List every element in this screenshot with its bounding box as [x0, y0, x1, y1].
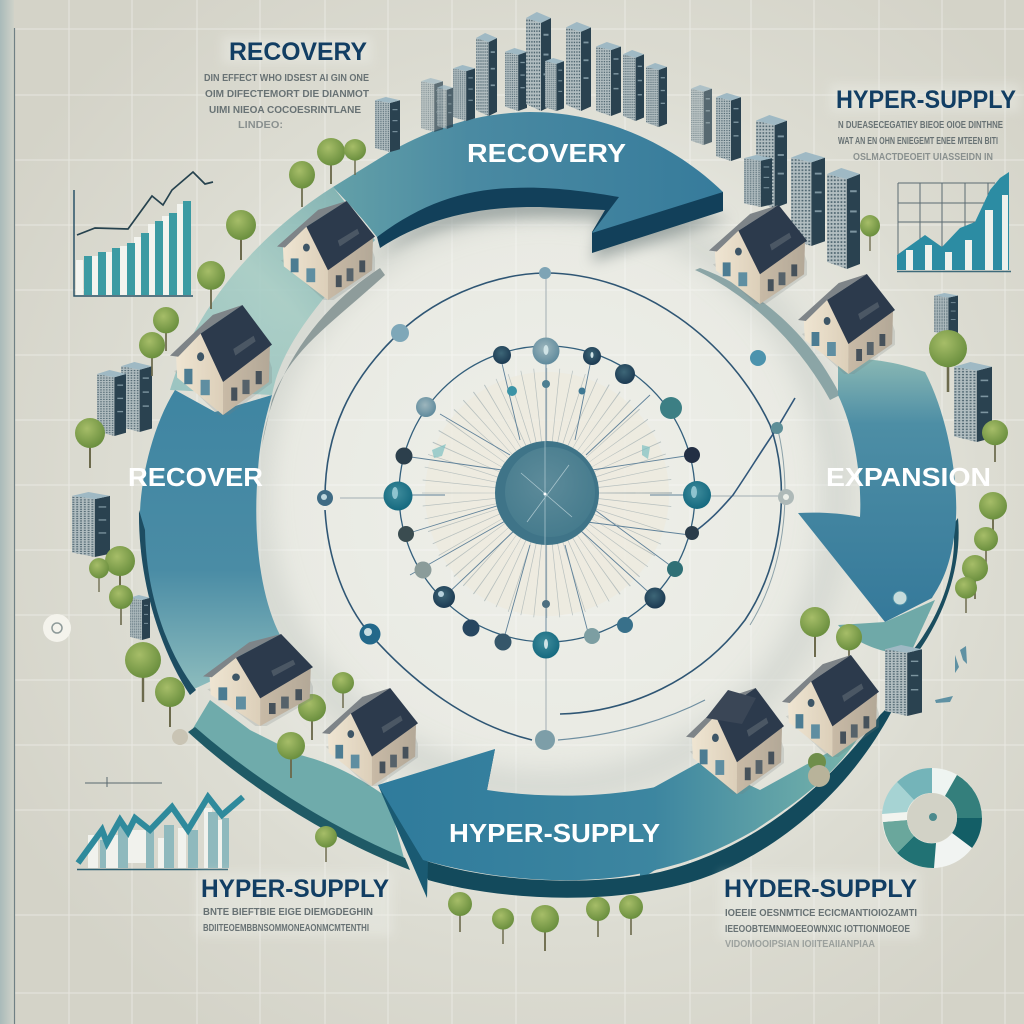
body text: OSLMACTDEOEIT UIASSEIDN IN [853, 152, 993, 163]
arrow label: RECOVERY [467, 138, 626, 168]
teal band [640, 735, 860, 880]
towers: right cluster [691, 85, 860, 269]
arrow label: HYPER-SUPPLY [449, 818, 660, 848]
small floating spheres [172, 591, 967, 745]
outer dark edge [913, 518, 959, 652]
chart: lower-left zigzag [77, 777, 243, 870]
panel: expansion arrow (right) [695, 268, 991, 653]
body text: UIMI NIEOA COCOESRINTLANE [209, 105, 361, 116]
white bars [76, 204, 184, 295]
arrow face [378, 749, 656, 880]
body text [838, 120, 1003, 163]
trees [75, 138, 1008, 951]
body text: OIM DIFECTEMORT DIE DIANMOT [205, 89, 369, 100]
body text: BDIITEOEMBBNSOMMONEAONMCMTENTHI [203, 923, 369, 934]
body text: BNTE BIEFTBIE EIGE DIEMGDEGHIN [203, 907, 373, 918]
underside [423, 695, 900, 898]
panel: hyper-supply arrow (bottom) [378, 695, 900, 898]
panel: upper-left ramp [170, 187, 385, 445]
barb [378, 785, 428, 898]
body text: DIN EFFECT WHO IDSEST AI GIN ONE [204, 73, 369, 84]
body text: IEEOOBTEMNMOEEOWNXIC IOTTIONMOEOE [725, 924, 910, 935]
text block: hyper-supply bottom left [197, 872, 393, 936]
panel: central network diagram [317, 267, 795, 750]
radial spokes [398, 351, 697, 644]
heading: RECOVERY [229, 38, 367, 66]
body text [204, 73, 369, 131]
small info badge [43, 614, 71, 642]
trend line [77, 172, 213, 235]
arrow face [798, 358, 956, 622]
outer ring nodes [317, 267, 794, 750]
inner pale disc [425, 372, 669, 616]
body text [725, 908, 917, 950]
heading: HYPER-SUPPLY [201, 875, 389, 903]
arrow underside [377, 170, 723, 253]
arrow top face [333, 112, 723, 237]
body text: LINDEO: [238, 120, 283, 131]
body text [203, 907, 373, 934]
grey ledge [262, 268, 385, 445]
arrow shadow [380, 197, 730, 262]
houses [170, 201, 899, 798]
bush by the lower-right house [808, 753, 830, 787]
body text: IOEEIE OESNMTICE ECICMANTIOIOZAMTI [725, 908, 917, 919]
pale band [695, 268, 840, 400]
heading: HYPER-SUPPLY [836, 86, 1016, 114]
white stripes [906, 195, 1008, 270]
inner network ring [399, 346, 695, 642]
panel: recover arrow (left) [128, 390, 280, 695]
heading: HYDER-SUPPLY [724, 875, 917, 903]
chart: recovery bars and line [74, 172, 213, 296]
text block: hyper-supply top right [830, 84, 1020, 163]
outer dark edge [139, 510, 196, 695]
panel: recovery arrow (top) [333, 112, 730, 262]
panel: lower-left teal ramp [188, 700, 410, 870]
towers: top skyline [375, 12, 667, 152]
chart: donut [882, 768, 982, 868]
towers: scattered [72, 293, 992, 716]
body text: VIDOMOOIPSIAN IOIITEAIIANPIAA [725, 939, 875, 950]
chart: hyper-supply rising area [897, 172, 1011, 272]
teal bars [84, 201, 191, 295]
central hub [495, 441, 599, 545]
outer orbit ring [325, 273, 795, 740]
arrow label: RECOVER [128, 462, 263, 492]
arrow label: EXPANSION [826, 462, 991, 492]
teal tail [838, 600, 935, 653]
text block: recovery [204, 36, 372, 131]
text block: hyder-supply bottom right [720, 872, 920, 950]
network nodes [384, 338, 711, 658]
